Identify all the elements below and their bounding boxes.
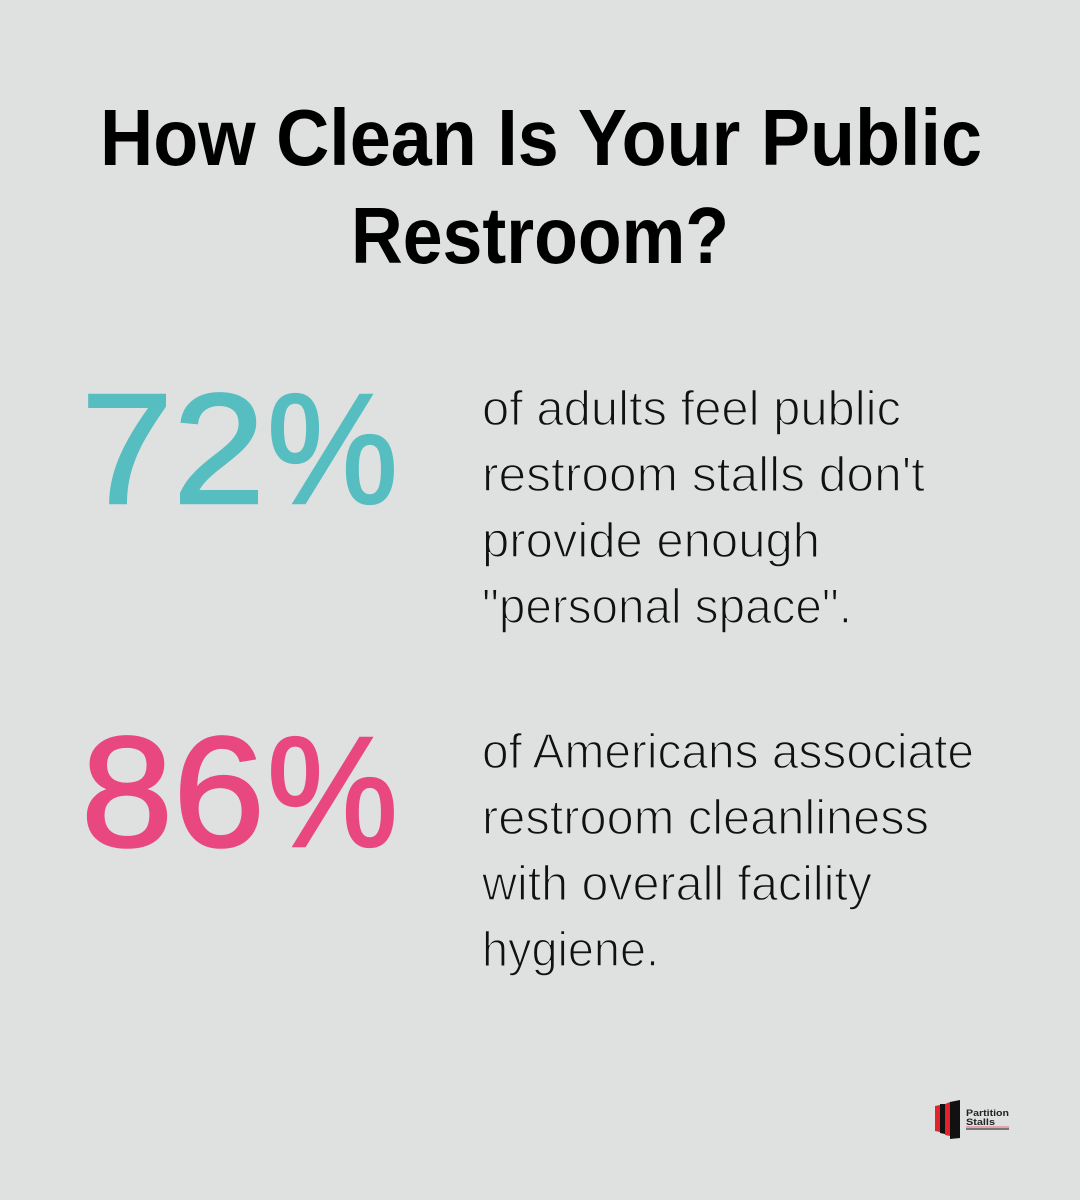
text block: personal space: restroom stalls don't	[482, 448, 925, 502]
stat: 72 percent: 72	[81, 362, 265, 537]
text block: personal space: "personal space".	[482, 580, 852, 634]
logo wordmark: Stalls	[966, 1117, 995, 1128]
text block: cleanliness: hygiene.	[482, 923, 659, 977]
title	[100, 93, 982, 280]
text block: personal space: provide enough	[482, 514, 820, 568]
stat: 72 percent	[81, 362, 398, 537]
title: Restroom?	[351, 191, 729, 280]
stat: 86 percent: 86	[81, 705, 265, 880]
logo: Partition Stalls	[935, 1100, 1009, 1139]
text block: cleanliness: with overall facility	[481, 857, 872, 911]
title: How Clean Is Your Public	[100, 93, 982, 182]
stat: 86 percent: %	[267, 705, 398, 880]
logo wordmark	[966, 1108, 1009, 1130]
icon: stall panels	[935, 1100, 960, 1139]
stat: 72 percent: %	[267, 362, 398, 537]
text block: personal space: of adults feel public	[482, 382, 901, 436]
text block: cleanliness: restroom cleanliness	[482, 791, 929, 845]
logo wordmark: Partition	[966, 1108, 1009, 1119]
text block: personal space	[482, 382, 925, 634]
text block: cleanliness	[481, 725, 974, 977]
stat: 86 percent	[81, 705, 398, 880]
text block: cleanliness: of Americans associate	[482, 725, 974, 779]
